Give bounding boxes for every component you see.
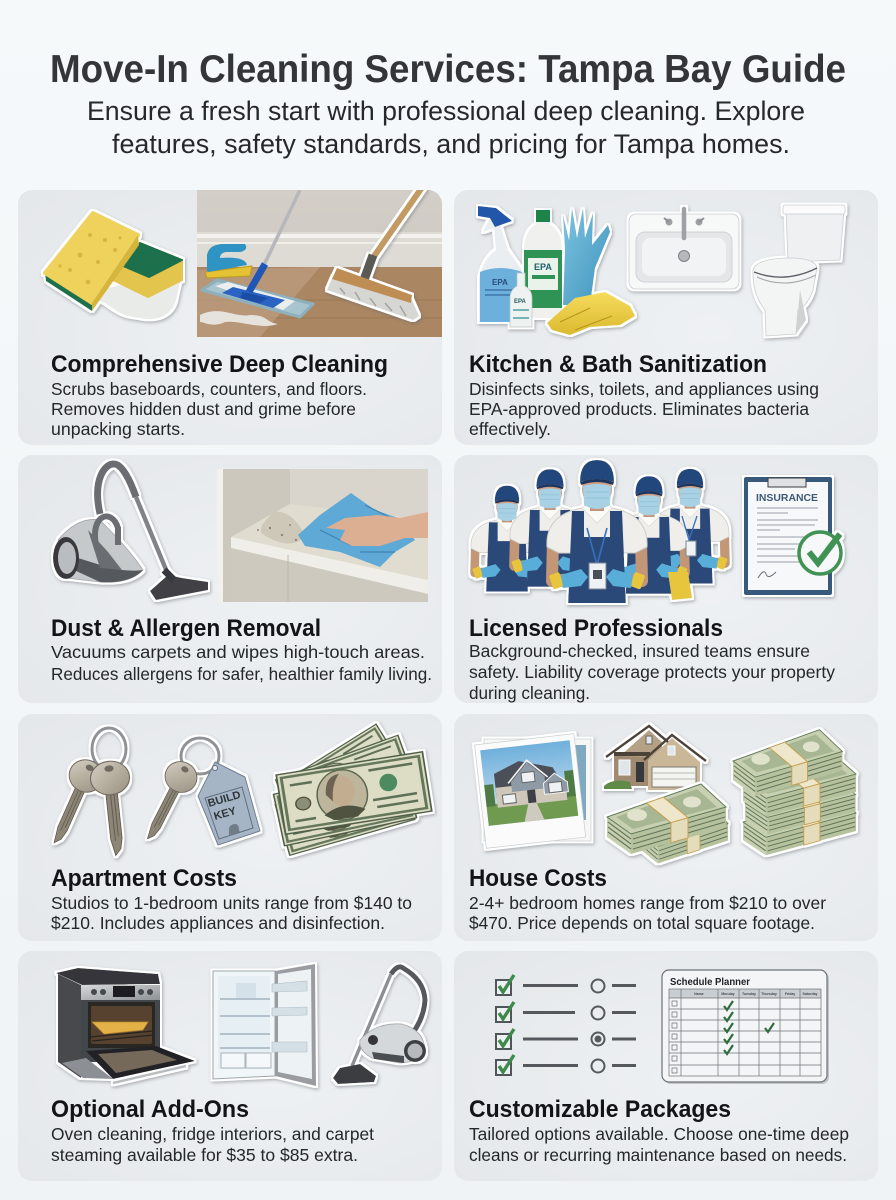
photo: mop, brush and broom on floor bbox=[197, 186, 442, 337]
description bbox=[469, 379, 819, 439]
icon: cleaning products and gloves bbox=[478, 206, 635, 335]
icon: cleaning products and gloves: EPA bbox=[492, 278, 508, 287]
icon: schedule planner table: Monday bbox=[721, 992, 735, 996]
description: safety. Liability coverage protects your property bbox=[469, 662, 835, 682]
icon: schedule planner table: Friday bbox=[785, 992, 795, 996]
description: EPA-approved products. Eliminates bacteria bbox=[469, 399, 809, 419]
description bbox=[51, 379, 367, 439]
description: Reduces allergens for safer, healthier family living. bbox=[51, 664, 432, 684]
description: unpacking starts. bbox=[51, 419, 185, 439]
description bbox=[469, 1124, 849, 1165]
description bbox=[51, 893, 412, 933]
icon: schedule planner table bbox=[662, 970, 829, 1084]
description bbox=[51, 1124, 374, 1165]
icon: schedule planner table: Tuesday bbox=[742, 992, 756, 996]
icon: toilet bbox=[753, 205, 845, 336]
heading: Comprehensive Deep Cleaning bbox=[51, 351, 388, 378]
description: $210. Includes appliances and disinfection. bbox=[51, 913, 385, 933]
photo: hand wiping dusty shelf bbox=[217, 469, 428, 602]
icon: cleaning team in uniforms bbox=[471, 460, 729, 607]
panel: licensed professionals bbox=[454, 455, 878, 703]
icon: canister vacuum bbox=[53, 464, 208, 600]
icon: cleaning products and gloves: EPA bbox=[534, 262, 552, 272]
heading: Dust & Allergen Removal bbox=[51, 615, 321, 642]
description: during cleaning. bbox=[469, 683, 590, 703]
icon: insurance clipboard with check: INSURANCE bbox=[756, 492, 818, 504]
sub: blue cloth bbox=[298, 493, 415, 567]
icon: cleaning products and gloves: EPA bbox=[514, 299, 527, 305]
icon: add-on vacuum bbox=[333, 967, 426, 1084]
icon: open refrigerator bbox=[213, 964, 316, 1086]
description: Background-checked, insured teams ensure bbox=[469, 641, 810, 661]
icon: pair of keys on ring bbox=[40, 728, 138, 857]
panel: customizable packages bbox=[454, 951, 878, 1181]
description: Vacuums carpets and wipes high-touch areas. bbox=[51, 642, 425, 662]
description: cleans or recurring maintenance based on needs. bbox=[469, 1145, 847, 1165]
icon: schedule planner table: Saturday bbox=[803, 992, 818, 996]
icon: key with build key tag bbox=[135, 738, 260, 847]
description: Scrubs baseboards, counters, and floors. bbox=[51, 379, 367, 399]
description: Oven cleaning, fridge interiors, and carpet bbox=[51, 1124, 374, 1144]
icon: key with build key tag: BUILD bbox=[207, 789, 242, 810]
icon: key with build key tag: KEY bbox=[213, 805, 238, 823]
sub: scrub brush bbox=[205, 244, 252, 278]
icon: checklist with radio options bbox=[496, 975, 636, 1075]
icon: house with garage bbox=[604, 726, 706, 790]
heading: House Costs bbox=[469, 865, 607, 892]
description: Tailored options available. Choose one-time deep bbox=[469, 1124, 849, 1144]
subtitle: Ensure a fresh start with professional deep cleaning. Explore bbox=[87, 96, 805, 126]
heading: Licensed Professionals bbox=[469, 615, 723, 642]
icon: insurance clipboard with check bbox=[744, 477, 841, 595]
panel: optional add-ons bbox=[18, 951, 442, 1181]
description bbox=[51, 642, 432, 684]
description: $470. Price depends on total square footage. bbox=[469, 913, 815, 933]
subtitle: features, safety standards, and pricing for Tampa homes. bbox=[112, 129, 790, 159]
description: 2-4+ bedroom homes range from $210 to over bbox=[469, 893, 826, 913]
panel: house costs bbox=[454, 714, 878, 941]
panel: kitchen and bath sanitization bbox=[454, 190, 878, 445]
description: effectively. bbox=[469, 419, 551, 439]
icon: money stacks tower bbox=[733, 730, 856, 855]
description: Disinfects sinks, toilets, and appliances using bbox=[469, 379, 819, 399]
subtitle bbox=[87, 96, 805, 159]
icon: schedule planner table: Thursday bbox=[761, 992, 777, 996]
sub: broom bbox=[327, 186, 423, 320]
panel: dust and allergen removal bbox=[18, 455, 442, 703]
icon: schedule planner table: Schedule Planner bbox=[670, 977, 750, 988]
heading: Apartment Costs bbox=[51, 865, 237, 892]
panel: apartment costs bbox=[18, 714, 442, 941]
description: Removes hidden dust and grime before bbox=[51, 399, 356, 419]
icon: money stack front bbox=[607, 784, 728, 863]
icon: oven with open door bbox=[56, 968, 195, 1083]
icon: schedule planner table: Name bbox=[694, 992, 704, 996]
description bbox=[469, 641, 835, 703]
heading: Kitchen & Bath Sanitization bbox=[469, 351, 767, 378]
description bbox=[469, 893, 826, 933]
title: Move-In Cleaning Services: Tampa Bay Guide bbox=[50, 48, 846, 91]
icon: sink bbox=[629, 209, 739, 289]
icon: sponges and foam bbox=[45, 213, 182, 319]
panel: comprehensive deep cleaning bbox=[18, 186, 442, 445]
heading: Optional Add-Ons bbox=[51, 1096, 249, 1123]
sub: hand bbox=[326, 512, 428, 546]
heading: Customizable Packages bbox=[469, 1096, 731, 1123]
icon: house photo prints bbox=[475, 734, 591, 848]
description: steaming available for $35 to $85 extra. bbox=[51, 1145, 358, 1165]
sub: flat mop bbox=[202, 190, 313, 317]
icon: dollar bills bbox=[273, 724, 432, 855]
description: Studios to 1-bedroom units range from $140 to bbox=[51, 893, 412, 913]
